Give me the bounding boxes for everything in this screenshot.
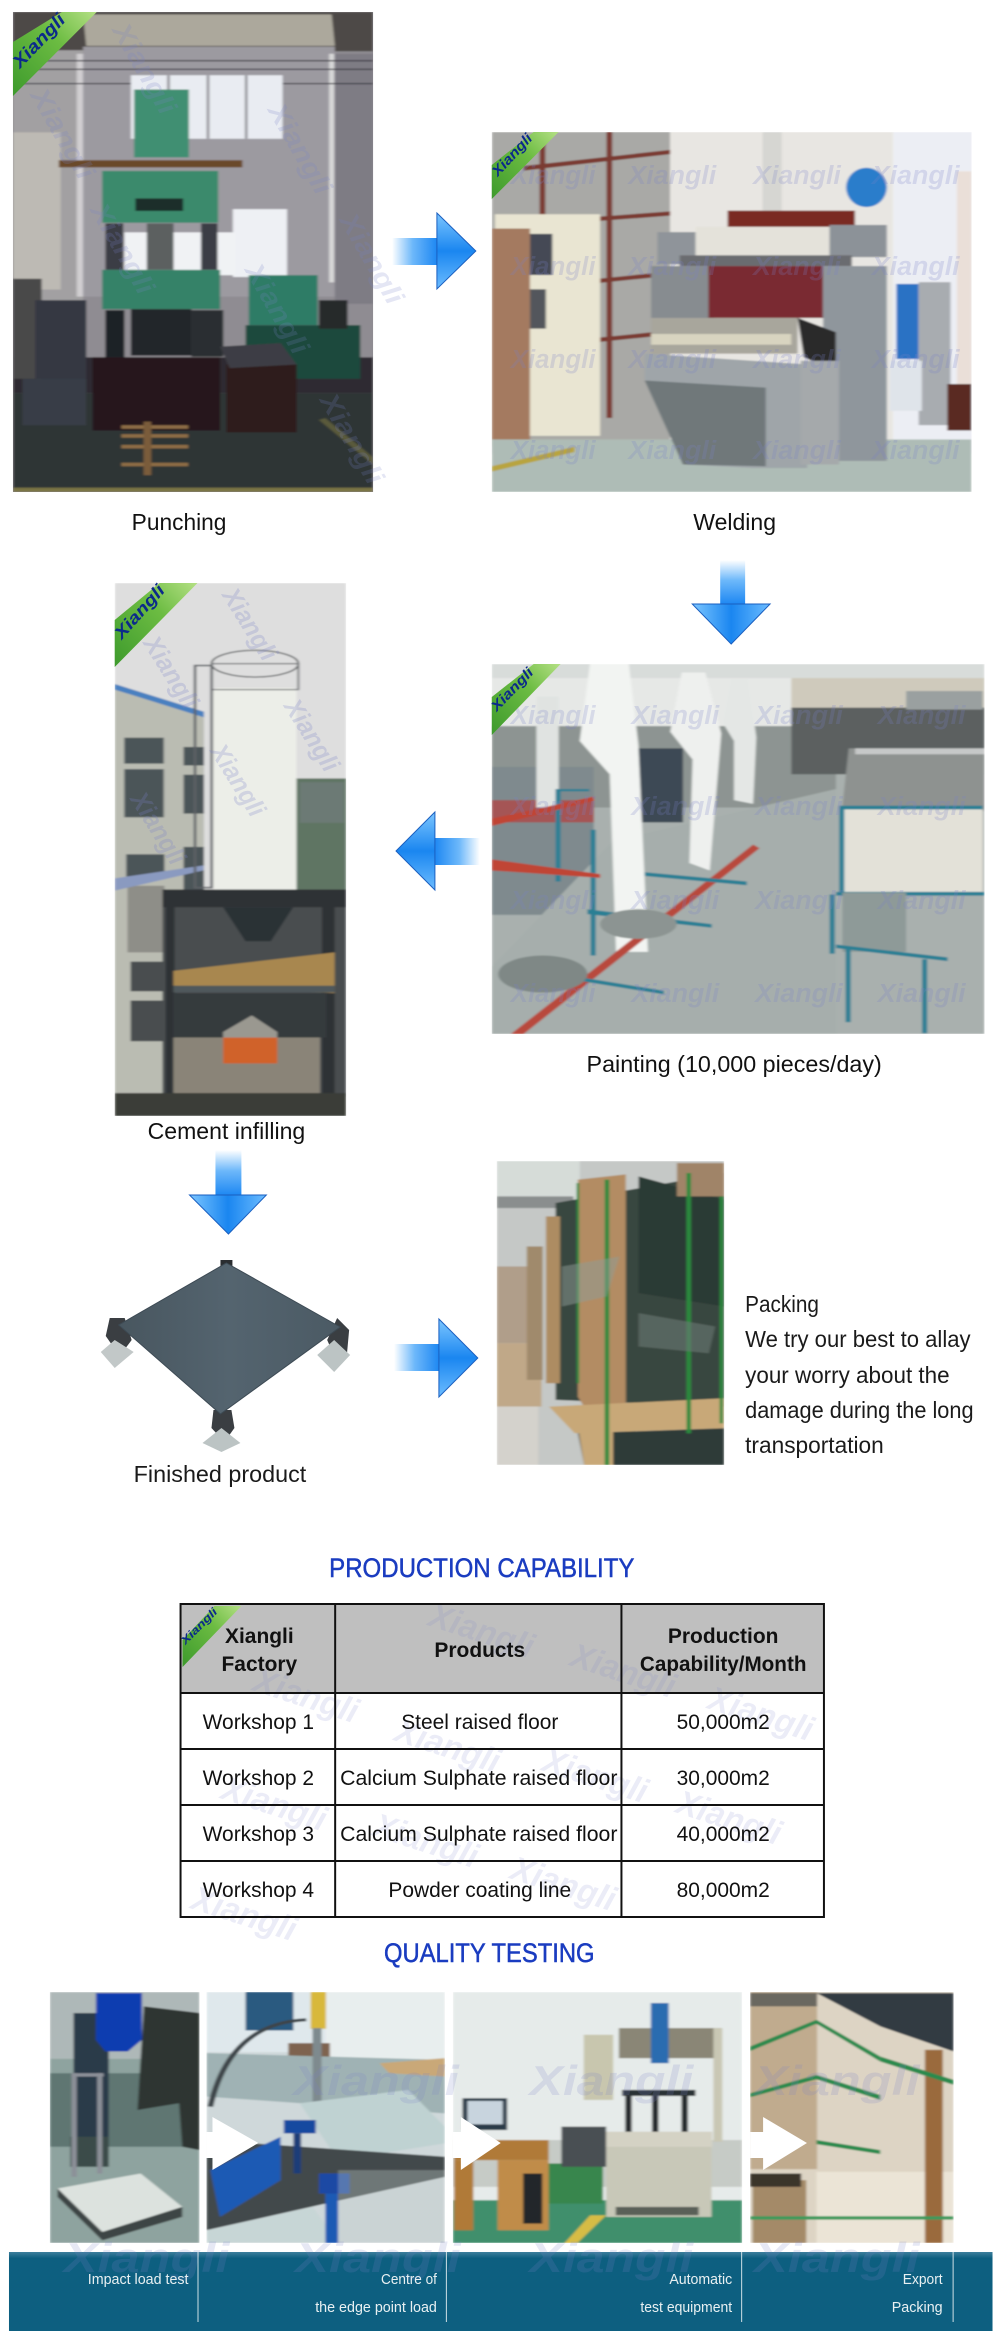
watermarks: Xiangli — [24, 81, 101, 185]
floor panel top — [119, 1263, 340, 1414]
floor pedestals — [101, 1260, 350, 1452]
table body text: 80,000m2 — [677, 1879, 770, 1902]
panel: painting photo — [487, 663, 985, 1034]
text block: packing note: We try our best to allay — [745, 1326, 971, 1352]
watermarks: Xiangli — [215, 581, 284, 667]
table body text: 50,000m2 — [677, 1711, 770, 1734]
icon: white arrow on edge-load photo — [206, 2117, 258, 2170]
label: Painting: Painting (10,000 pieces/day) — [587, 1051, 882, 1077]
arrow: cement to finished product — [190, 1150, 266, 1234]
panel: punching photo — [0, 0, 446, 536]
watermarks: Xiangli — [626, 344, 717, 374]
quality photo watermarks: Xiangli — [61, 2234, 231, 2281]
ribbon logo: Xiangli — [487, 129, 536, 180]
watermarks: Xiangli — [751, 344, 842, 374]
label: Welding: Welding — [693, 509, 776, 535]
panel: cement infilling photo — [110, 581, 346, 1116]
watermarks: Xiangli — [509, 160, 596, 190]
quality photo watermarks: Xiangli — [527, 2057, 695, 2104]
watermarks: Xiangli — [509, 344, 596, 374]
watermarks: Xiangli — [876, 791, 966, 821]
table watermarks: Xiangli — [536, 1741, 654, 1811]
watermarks: Xiangli — [137, 629, 206, 715]
arrow: finished product to packing — [394, 1319, 478, 1397]
table watermarks: Xiangli — [215, 1769, 333, 1839]
watermarks — [124, 581, 346, 871]
table watermarks: Xiangli — [702, 1679, 819, 1749]
ribbon logo — [8, 9, 97, 96]
watermarks: Xiangli — [870, 435, 960, 465]
watermarks — [24, 16, 410, 490]
label: Finished product: Finished product — [134, 1461, 307, 1487]
text block: packing note: Packing — [745, 1291, 819, 1317]
watermarks: Xiangli — [509, 251, 596, 281]
watermarks — [509, 160, 960, 465]
panel: finished product raised floor — [101, 1260, 350, 1452]
band dividers — [198, 2252, 953, 2322]
quality photo watermarks: Xiangli — [291, 2057, 460, 2104]
watermarks: Xiangli — [870, 160, 960, 190]
watermarks: Xiangli — [105, 16, 183, 120]
table ribbon — [178, 1605, 241, 1667]
watermarks: Xiangli — [203, 737, 272, 823]
table watermarks: Xiangli — [504, 1849, 622, 1919]
table watermarks: Xiangli — [247, 1661, 365, 1731]
watermarks — [509, 700, 966, 1008]
caption: automatic test equipment: test equipment — [640, 2299, 733, 2316]
caption: automatic test equipment: Automatic — [669, 2271, 733, 2288]
watermarks: Xiangli — [753, 700, 844, 730]
watermarks: Xiangli — [261, 96, 338, 200]
text block: packing note: damage during the long — [745, 1397, 974, 1423]
caption: impact load test: Impact load test — [88, 2271, 189, 2288]
watermarks: Xiangli — [509, 435, 596, 465]
ribbon logo: Xiangli — [110, 581, 169, 644]
table watermarks: Xiangli — [389, 1711, 506, 1781]
watermarks: Xiangli — [753, 885, 844, 915]
table body text: 40,000m2 — [677, 1823, 770, 1846]
quality photo watermarks: Xiangli — [752, 2057, 921, 2104]
panel: export packing photo — [750, 1992, 954, 2243]
caption: export packing — [892, 2271, 943, 2316]
text block: packing note: your worry about the — [745, 1362, 950, 1388]
table body text: Calcium Sulphate raised floor — [340, 1767, 617, 1790]
panel: impact load test photo — [50, 1992, 200, 2243]
arrow: punching to welding — [392, 213, 476, 289]
table header background — [181, 1604, 824, 1693]
watermarks: Xiangli — [626, 435, 717, 465]
watermarks: Xiangli — [629, 700, 720, 730]
table grid — [181, 1604, 824, 1917]
caption: export packing: Packing — [892, 2299, 943, 2316]
watermarks: Xiangli — [751, 251, 842, 281]
caption: centre of the edge point load: Centre of — [381, 2271, 438, 2288]
table body text: Workshop 3 — [203, 1823, 314, 1846]
table body text: Calcium Sulphate raised floor — [340, 1823, 617, 1846]
watermarks: Xiangli — [626, 251, 717, 281]
caption: automatic test equipment — [640, 2271, 733, 2316]
text block: packing note: transportation — [745, 1432, 884, 1458]
quality photo watermarks: Xiangli — [293, 2234, 462, 2281]
watermarks: Xiangli — [751, 435, 842, 465]
caption: centre of the edge point load: the edge point load — [315, 2299, 437, 2316]
table watermarks: Xiangli — [367, 1806, 484, 1876]
watermarks: Xiangli — [753, 978, 844, 1008]
watermarks: Xiangli — [751, 160, 842, 190]
heading: production capability: PRODUCTION CAPABILITY — [329, 1553, 634, 1583]
table: production capability — [178, 1596, 824, 1949]
heading: quality testing: QUALITY TESTING — [384, 1938, 595, 1968]
table watermarks: Xiangli — [423, 1596, 540, 1666]
table header text: Production — [668, 1625, 778, 1648]
watermarks: Xiangli — [753, 791, 844, 821]
watermarks: Xiangli — [876, 700, 966, 730]
quality photo watermarks — [61, 2057, 921, 2281]
watermarks: Xiangli — [629, 791, 720, 821]
band captions — [88, 2271, 943, 2316]
table body text: Workshop 4 — [203, 1879, 314, 1902]
caption: centre of the edge point load — [315, 2271, 438, 2316]
watermarks: Xiangli — [870, 344, 960, 374]
table header text — [222, 1625, 806, 1676]
table header text: Xiangli — [225, 1625, 294, 1648]
watermarks: Xiangli — [124, 785, 193, 871]
watermarks: Xiangli — [333, 206, 410, 310]
label: Cement infilling: Cement infilling — [148, 1118, 305, 1144]
icon: white arrow on packing photo — [750, 2117, 807, 2170]
watermarks: Xiangli — [629, 885, 720, 915]
watermarks: Xiangli — [277, 692, 346, 778]
table body text: 30,000m2 — [677, 1767, 770, 1790]
table body text: Powder coating line — [388, 1879, 571, 1902]
quality photo watermarks: Xiangli — [527, 2234, 695, 2281]
teal caption band — [9, 2252, 993, 2331]
table watermarks: Xiangli — [564, 1636, 682, 1706]
icon: white arrow on equipment photo — [453, 2117, 501, 2170]
panel: welding photo — [487, 129, 973, 492]
watermarks: Xiangli — [509, 700, 596, 730]
arrow: welding to painting — [692, 560, 770, 644]
table body text: Steel raised floor — [401, 1711, 558, 1734]
watermarks: Xiangli — [509, 791, 596, 821]
watermarks: Xiangli — [876, 885, 966, 915]
table body text: Workshop 1 — [203, 1711, 314, 1734]
watermarks: Xiangli — [238, 256, 315, 360]
watermarks: Xiangli — [509, 885, 596, 915]
ribbon logo: Xiangli — [8, 9, 70, 73]
caption: export packing: Export — [903, 2271, 943, 2288]
table body text — [203, 1711, 770, 1902]
table watermarks — [185, 1596, 819, 1949]
panel: centre of edge point load photo — [206, 1992, 445, 2243]
table watermarks: Xiangli — [670, 1783, 787, 1853]
quality photo watermarks: Xiangli — [752, 2234, 921, 2281]
ribbon logo: Xiangli — [487, 663, 537, 715]
ribbon logo — [487, 129, 559, 199]
table body text: Workshop 2 — [203, 1767, 314, 1790]
table ribbon: Xiangli — [178, 1605, 221, 1648]
arrow: painting to cement — [396, 812, 480, 890]
watermarks: Xiangli — [313, 386, 390, 490]
watermarks: Xiangli — [509, 978, 596, 1008]
panel: packing photo — [496, 1161, 724, 1465]
table header text: Capability/Month — [640, 1653, 806, 1676]
watermarks: Xiangli — [83, 196, 161, 300]
table header text: Factory — [222, 1653, 298, 1676]
table header text: Products — [434, 1639, 525, 1662]
watermarks: Xiangli — [876, 978, 966, 1008]
label: Punching: Punching — [132, 509, 226, 535]
table watermarks: Xiangli — [185, 1879, 303, 1949]
ribbon logo — [487, 663, 561, 735]
watermarks: Xiangli — [870, 251, 960, 281]
ribbon logo — [110, 581, 198, 667]
watermarks: Xiangli — [629, 978, 720, 1008]
text block: packing note — [745, 1291, 974, 1458]
watermarks: Xiangli — [626, 160, 717, 190]
panel: automatic test equipment photo — [452, 1992, 742, 2243]
